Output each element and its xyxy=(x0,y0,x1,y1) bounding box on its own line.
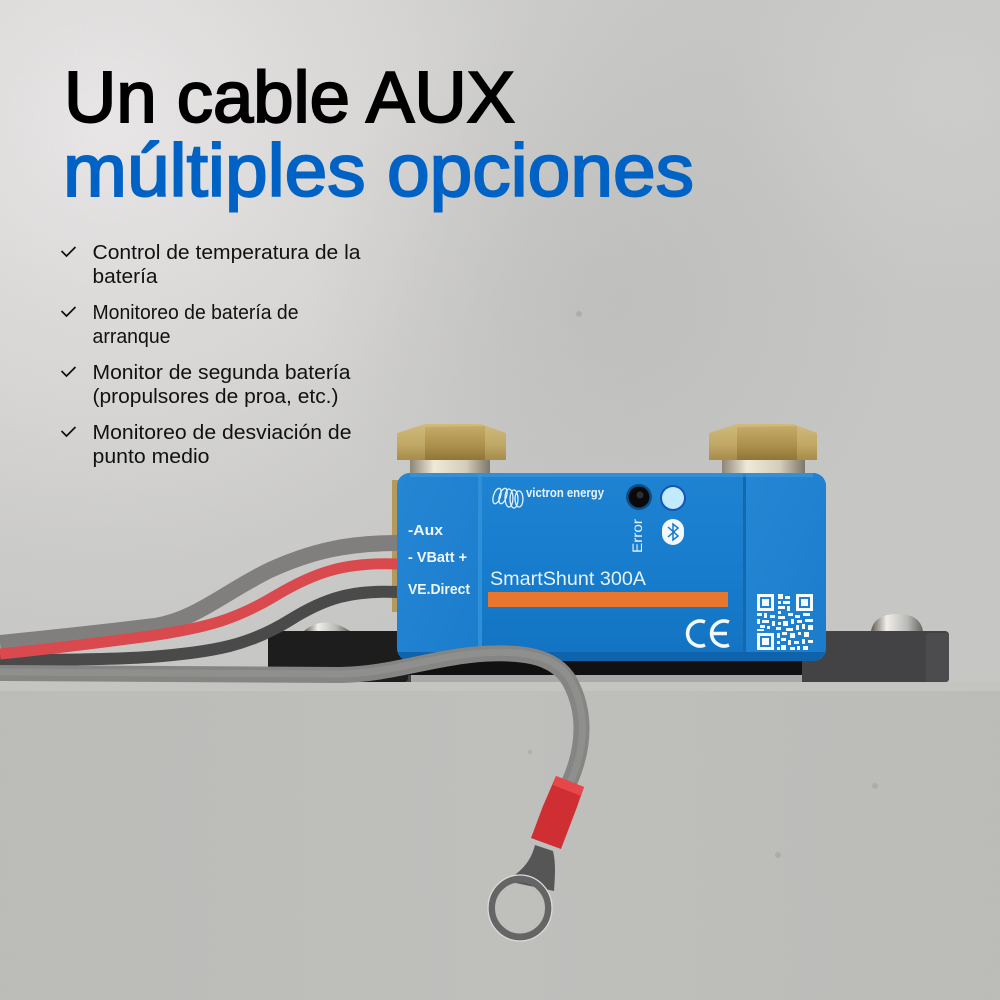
item: second battery: Monitor de segunda batería xyxy=(92,362,351,384)
connector labels: - VBatt + xyxy=(408,550,467,566)
bracket screws xyxy=(304,614,923,631)
title line 2: múltiples opciones xyxy=(63,129,694,212)
item: midpoint: punto medio xyxy=(92,446,210,468)
qr code xyxy=(757,594,813,650)
grey cable to ring terminal xyxy=(0,652,582,783)
red vbatt wire xyxy=(0,564,398,654)
ce mark xyxy=(688,621,729,646)
connector labels: VE.Direct xyxy=(408,582,470,598)
item: midpoint xyxy=(62,422,352,468)
brass bar behind body xyxy=(392,480,400,612)
checklist xyxy=(62,242,361,468)
mounting bracket xyxy=(268,631,949,682)
right end cap xyxy=(746,473,826,661)
model name: SmartShunt 300A xyxy=(490,568,646,590)
brass terminal nut left xyxy=(397,424,506,473)
orange bar xyxy=(488,592,728,607)
bluetooth led xyxy=(660,485,686,511)
connector labels: -Aux xyxy=(408,523,443,539)
item: starter battery xyxy=(62,302,298,348)
error led xyxy=(626,484,652,510)
grey aux wire xyxy=(0,543,398,643)
device body xyxy=(397,473,826,661)
bluetooth icon xyxy=(662,519,684,545)
aux, power and ve.direct cables xyxy=(0,543,398,660)
red crimp sleeve xyxy=(531,776,584,849)
concrete ledge block xyxy=(0,682,1000,1000)
concrete wall background xyxy=(0,0,1000,690)
error label: Error xyxy=(629,519,645,553)
title xyxy=(63,58,694,212)
item: starter battery: Monitoreo de batería de xyxy=(92,302,298,324)
item: midpoint: Monitoreo de desviación de xyxy=(92,422,352,444)
logo coils xyxy=(491,487,523,508)
left end cap xyxy=(397,473,478,661)
item: temperature: batería xyxy=(92,266,158,288)
item: second battery: (propulsores de proa, etc.) xyxy=(92,386,338,408)
connector labels xyxy=(408,523,470,598)
item: second battery xyxy=(62,362,351,408)
victron energy logo xyxy=(491,486,604,508)
brass terminal nut right xyxy=(709,424,817,473)
concrete pits xyxy=(528,311,878,858)
item: temperature: Control de temperatura de la xyxy=(92,242,361,264)
logo wordmark: victron energy xyxy=(526,486,604,500)
item: temperature xyxy=(62,242,361,288)
title line 1: Un cable AUX xyxy=(64,58,515,138)
metal ring xyxy=(492,879,548,937)
ring terminal xyxy=(488,776,584,941)
dark ve.direct wire xyxy=(0,592,398,660)
metal neck xyxy=(506,845,555,891)
item: starter battery: arranque xyxy=(92,326,170,348)
